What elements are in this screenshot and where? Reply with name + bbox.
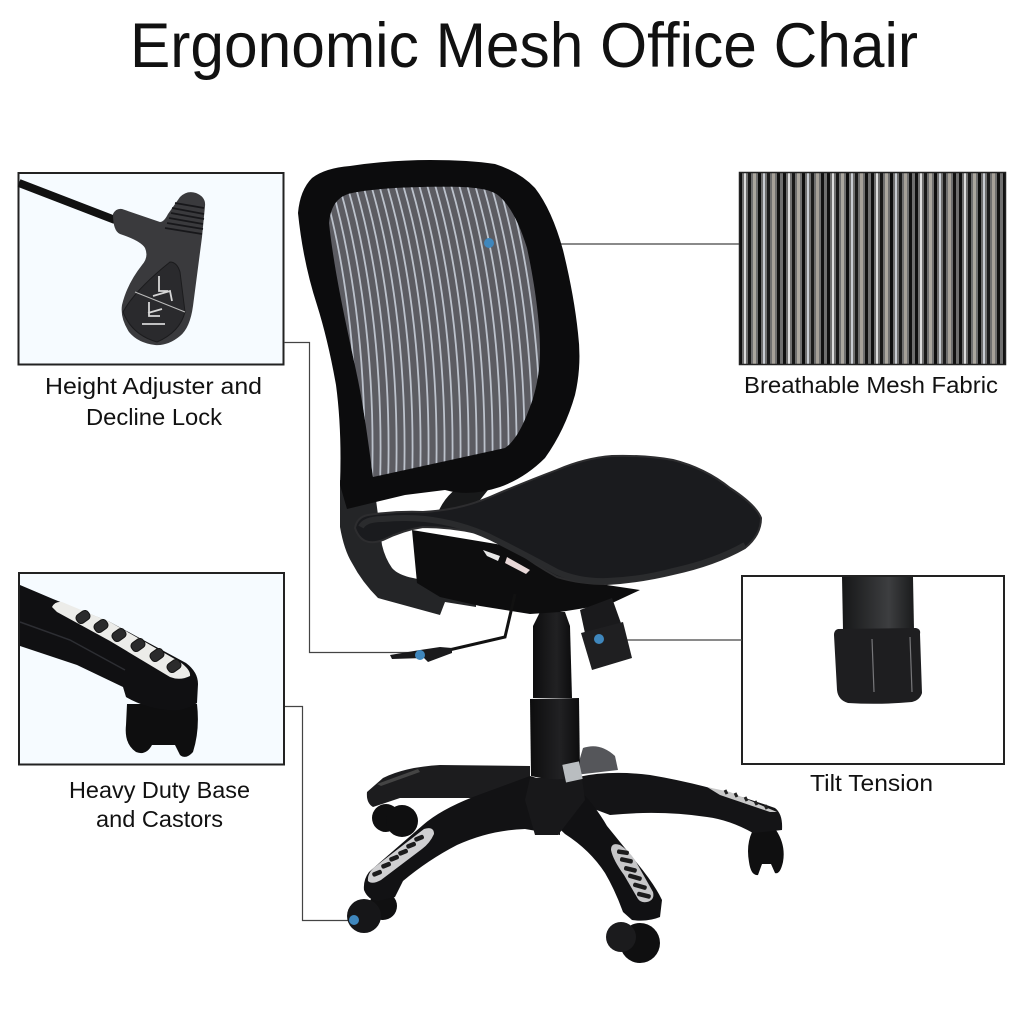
panel: breathable mesh fabric (740, 172, 1006, 364)
chair: lever rod and paddle (390, 594, 515, 662)
panel: height adjuster and decline lock (18, 173, 284, 364)
chair: frame arm behind seat (435, 475, 500, 520)
chair: mechanism light strip (483, 550, 500, 561)
chair: seat mechanism (412, 530, 640, 614)
icon: base arm (20, 585, 198, 710)
panel: heavy duty base and castors (19, 573, 284, 764)
chair: base front right arm (545, 785, 662, 921)
icon: lever handle (113, 192, 205, 345)
connector: height adjuster to lever (284, 342, 420, 652)
chair: base rear arm (575, 746, 618, 775)
icon: plate buttons (74, 609, 183, 674)
chair: base left arm (367, 765, 530, 807)
chair: back mesh panel (329, 186, 540, 477)
icon: tilt shaft (842, 577, 914, 630)
marker: height lever (415, 650, 425, 660)
chair: seat warning sticker (505, 557, 530, 574)
chair: rear right caster (748, 830, 784, 875)
icon: lever cable (19, 183, 115, 220)
chair: front right caster (606, 922, 660, 963)
chair: base right arm (570, 773, 782, 833)
label: tilt tension: Tilt Tension (810, 770, 933, 796)
chair: front right plate (611, 844, 653, 902)
icon: tilt collar (834, 628, 922, 704)
chair: left arm plate (377, 769, 420, 786)
chair: tilt knob (581, 622, 632, 670)
marker: caster (349, 915, 359, 925)
chair: right arm plate (707, 787, 777, 812)
chair: base label sticker (562, 761, 583, 782)
label: heavy duty base: and Castors (96, 806, 223, 832)
office chair (296, 160, 784, 963)
marker: mesh (484, 238, 494, 248)
icon: base arm metal plate (52, 602, 190, 679)
label: height adjuster: Height Adjuster and (45, 373, 262, 399)
chair: base front left arm (364, 776, 560, 901)
chair: gas sleeve (530, 698, 580, 779)
chair: front left caster (347, 892, 397, 933)
label: height adjuster (45, 373, 262, 430)
connector: tilt knob to panel (600, 639, 742, 641)
chair: front left plate (368, 828, 434, 883)
title: Ergonomic Mesh Office Chair (130, 11, 918, 81)
label: height adjuster: Decline Lock (86, 404, 223, 430)
chair: gas cylinder (533, 612, 572, 698)
marker: tilt knob (594, 634, 604, 644)
chair: lower frame (340, 480, 476, 615)
label: breathable mesh fabric: Breathable Mesh Fabric (744, 372, 998, 398)
chair: tilt shaft (580, 598, 622, 638)
chair: seat rim (361, 518, 745, 581)
panel: tilt tension (742, 576, 1004, 764)
label: heavy duty base: Heavy Duty Base (69, 777, 250, 803)
connector: mesh to fabric panel (489, 243, 739, 245)
chair: back frame (298, 160, 579, 509)
chair: rear left caster (372, 804, 418, 837)
connector: base to caster (285, 706, 354, 920)
label: heavy duty base (69, 777, 250, 832)
icon: caster wheel (126, 704, 198, 757)
chair: base hub (525, 778, 585, 835)
chair: seat (355, 456, 761, 584)
